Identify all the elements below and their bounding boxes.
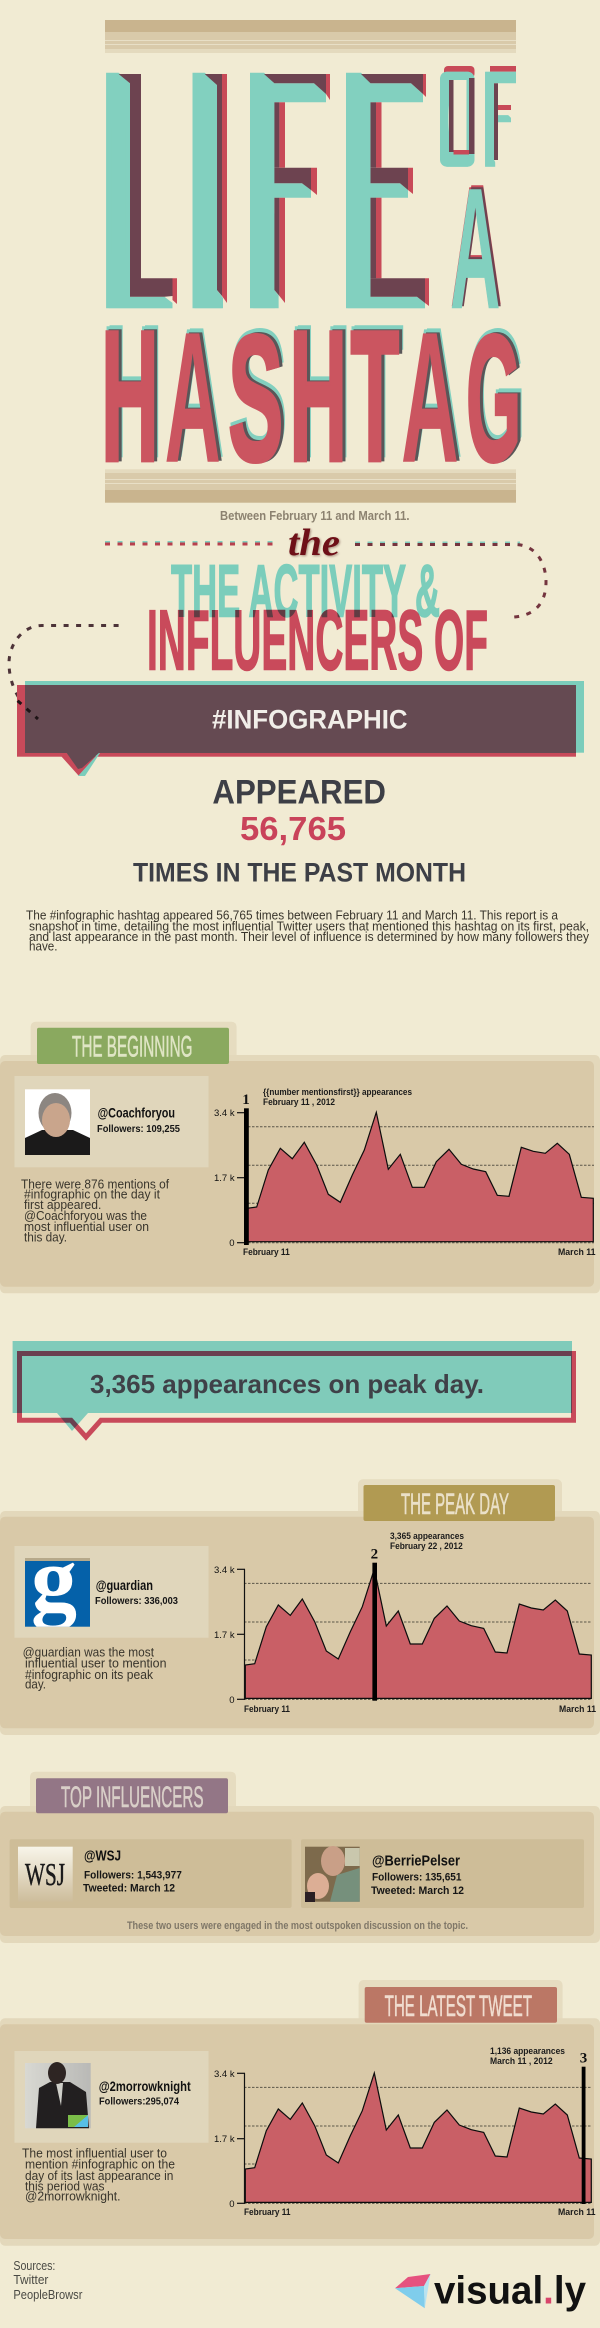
user card: 2morrowknight bbox=[14, 2051, 208, 2143]
marker 1 bbox=[244, 1108, 249, 1245]
influencer: WSJ bbox=[10, 1839, 292, 1908]
word: OF bbox=[440, 66, 516, 167]
intro paragraph bbox=[26, 908, 590, 954]
logo: WSJ: WSJ bbox=[25, 1856, 65, 1892]
avatar: BerriePelser bbox=[305, 1846, 360, 1902]
chart: peak day: 3.4 k bbox=[214, 1565, 235, 1576]
letter F: F bbox=[243, 0, 335, 382]
title: HASHTAG: T bbox=[350, 293, 399, 501]
panel: the beginning bbox=[0, 1022, 600, 1293]
logo: guardian bbox=[25, 1558, 90, 1627]
chart: first day: March 11 bbox=[558, 1247, 596, 1257]
description: the beginning: first appeared. bbox=[24, 1198, 101, 1212]
chart: peak day: 1.7 k bbox=[214, 1630, 235, 1641]
description: the beginning: this day. bbox=[24, 1231, 67, 1245]
marker 2 bbox=[372, 1563, 377, 1701]
date range: Between February 11 and March 11. bbox=[220, 509, 410, 523]
icon: gem bbox=[395, 2274, 430, 2308]
description: latest tweet: The most influential user to bbox=[22, 2147, 167, 2161]
headline stats bbox=[133, 773, 466, 888]
caption: These two users were engaged in the most outspoken discussion on the topic. bbox=[127, 1920, 468, 1932]
callout label: 3,365 appearances on peak day. bbox=[90, 1369, 484, 1399]
chart: peak day: February 22 , 2012 bbox=[390, 1541, 463, 1551]
chart: peak day: March 11 bbox=[559, 1704, 596, 1714]
chart: latest tweet: March 11 , 2012 bbox=[490, 2056, 553, 2066]
user card: Coachforyou: @Coachforyou bbox=[98, 1105, 175, 1120]
chart: latest tweet: 3 bbox=[580, 2051, 587, 2067]
influencer: BerriePelser: Tweeted: March 12 bbox=[371, 1885, 464, 1897]
description: latest tweet bbox=[22, 2147, 175, 2204]
user card: guardian: @guardian bbox=[96, 1578, 153, 1593]
description: the beginning: most influential user on bbox=[24, 1220, 149, 1234]
influencer: BerriePelser: Followers: 135,651 bbox=[372, 1872, 462, 1884]
chart: latest tweet: 1.7 k bbox=[214, 2134, 235, 2145]
chart: first day: February 11 , 2012 bbox=[263, 1097, 335, 1107]
letter A: A bbox=[450, 152, 501, 345]
description: the beginning: There were 876 mentions of bbox=[21, 1177, 170, 1191]
description: latest tweet: mention #infographic on the bbox=[25, 2158, 175, 2172]
title: HASHTAG: G bbox=[466, 297, 521, 499]
description: the beginning bbox=[21, 1177, 170, 1245]
title: HASHTAG: A bbox=[401, 294, 459, 502]
annotation: 3,365 appearances bbox=[390, 1531, 464, 1541]
influencer: BerriePelser: @BerriePelser bbox=[372, 1853, 460, 1870]
word: OF: O bbox=[434, 21, 480, 216]
banner: #INFOGRAPHIC bbox=[17, 681, 584, 776]
letter F bbox=[250, 72, 330, 308]
influencer: WSJ: @WSJ bbox=[84, 1848, 121, 1865]
marker 3 bbox=[582, 2067, 586, 2204]
chart: first day: 0 bbox=[229, 1238, 235, 1249]
panel: top influencers bbox=[0, 1772, 600, 1943]
chart: first day: 3.4 k bbox=[214, 1108, 235, 1119]
heading: the activity and influencers of bbox=[147, 550, 488, 688]
headline stats: APPEARED bbox=[212, 773, 386, 811]
sources: PeopleBrowsr bbox=[13, 2287, 83, 2302]
annotation: 1,136 appearances bbox=[490, 2046, 565, 2056]
tab: top influencers: TOP INFLUENCERS bbox=[61, 1781, 204, 1814]
chart: latest tweet: March 11 bbox=[558, 2207, 596, 2217]
chart: peak day bbox=[214, 1531, 596, 1714]
tab: the beginning bbox=[37, 1028, 229, 1064]
title: HASHTAG: S bbox=[228, 297, 283, 499]
chart: latest tweet: 3.4 k bbox=[214, 2069, 235, 2080]
letter I: I bbox=[182, 0, 234, 381]
description: peak day: #infographic on its peak bbox=[25, 1668, 154, 1682]
user card: Coachforyou: Followers: 109,255 bbox=[97, 1123, 180, 1135]
intro paragraph: snapshot in time, detailing the most influential Twitter users that mentioned this hashtag on its first, peak, bbox=[29, 919, 589, 933]
description: the beginning: #infographic on the day it bbox=[24, 1187, 161, 1201]
chart: first day: 1.7 k bbox=[214, 1173, 235, 1184]
description: the beginning: @Coachforyou was the bbox=[24, 1209, 147, 1223]
tab: the latest tweet bbox=[365, 1987, 557, 2023]
influencer: WSJ: Tweeted: March 12 bbox=[83, 1883, 175, 1895]
chart: latest tweet: February 11 bbox=[244, 2207, 290, 2217]
letter I bbox=[192, 72, 227, 308]
dots over the banner bbox=[18, 701, 38, 719]
description: latest tweet: day of its last appearance in bbox=[25, 2169, 173, 2183]
description: peak day: day. bbox=[25, 1678, 46, 1692]
letter E bbox=[346, 72, 429, 308]
user card: 2morrowknight: Followers:295,074 bbox=[99, 2096, 179, 2108]
panel: the latest tweet bbox=[0, 1980, 600, 2246]
visual.ly logo: visual.ly bbox=[434, 2269, 586, 2312]
avatar: 2morrowknight bbox=[25, 2062, 91, 2128]
title: HASHTAG: H bbox=[289, 293, 347, 501]
script word: the: the bbox=[288, 522, 340, 564]
intro paragraph: and last appearance in the past month. Their level of influence is determined by how many followers they bbox=[29, 930, 590, 944]
influencer: BerriePelser bbox=[301, 1839, 584, 1908]
user card: guardian: Followers: 336,003 bbox=[95, 1595, 178, 1607]
title: HASHTAG bbox=[101, 293, 521, 502]
letter L bbox=[106, 72, 177, 308]
banner label: #INFOGRAPHIC bbox=[212, 705, 408, 735]
sources: Sources: bbox=[13, 2258, 55, 2273]
chart: peak day: 0 bbox=[229, 1695, 235, 1706]
influencer: WSJ: Followers: 1,543,977 bbox=[84, 1870, 182, 1882]
user card: guardian bbox=[14, 1546, 208, 1638]
sources: Twitter bbox=[13, 2272, 49, 2287]
chart: latest tweet: 0 bbox=[229, 2199, 235, 2210]
avatar: Coachforyou bbox=[25, 1089, 90, 1155]
tab: the beginning: THE BEGINNING bbox=[72, 1031, 192, 1064]
chart: first day: February 11 bbox=[243, 1247, 290, 1257]
annotation: {{number mentionsfirst}} appearances bbox=[263, 1087, 412, 1097]
chart: latest tweet bbox=[214, 2046, 596, 2217]
intro paragraph: The #infographic hashtag appeared 56,765 times between February 11 and March 11. This report is a bbox=[26, 908, 558, 922]
chart: first day bbox=[214, 1087, 596, 1257]
description: latest tweet: @2morrowknight. bbox=[25, 2190, 120, 2204]
description: latest tweet: this period was bbox=[25, 2180, 104, 2194]
headline stats: 56,765 bbox=[240, 810, 346, 847]
logo: WSJ bbox=[18, 1847, 73, 1902]
title: LIFE OF A bbox=[106, 66, 516, 308]
intro paragraph: have. bbox=[29, 940, 58, 954]
headline stats: TIMES IN THE PAST MONTH bbox=[133, 858, 466, 888]
description: peak day: @guardian was the most bbox=[23, 1646, 154, 1660]
description: peak day: influential user to mention bbox=[25, 1657, 167, 1671]
tab: top influencers bbox=[36, 1778, 228, 1814]
callout: peak day bbox=[13, 1341, 574, 1437]
letter L: L bbox=[100, 0, 181, 381]
logo: guardian: g bbox=[31, 1528, 77, 1630]
word: OF: F bbox=[482, 42, 519, 196]
top stripes bbox=[105, 20, 516, 53]
panel: the peak day bbox=[0, 1479, 600, 1735]
chart: peak day: February 11 bbox=[244, 1704, 290, 1714]
chart: first day: 1 bbox=[242, 1092, 250, 1108]
sources bbox=[13, 2258, 83, 2302]
letter E: E bbox=[338, 0, 434, 381]
dotted route bbox=[9, 542, 546, 719]
user card: Coachforyou bbox=[14, 1076, 208, 1167]
chart: peak day: 2 bbox=[371, 1546, 378, 1562]
description: peak day bbox=[23, 1646, 167, 1692]
title: HASHTAG: A bbox=[164, 295, 221, 502]
title: HASHTAG: H bbox=[101, 293, 159, 501]
user card: 2morrowknight: @2morrowknight bbox=[99, 2079, 191, 2094]
bottom stripes bbox=[105, 469, 516, 503]
tab: the peak day bbox=[364, 1485, 555, 1521]
